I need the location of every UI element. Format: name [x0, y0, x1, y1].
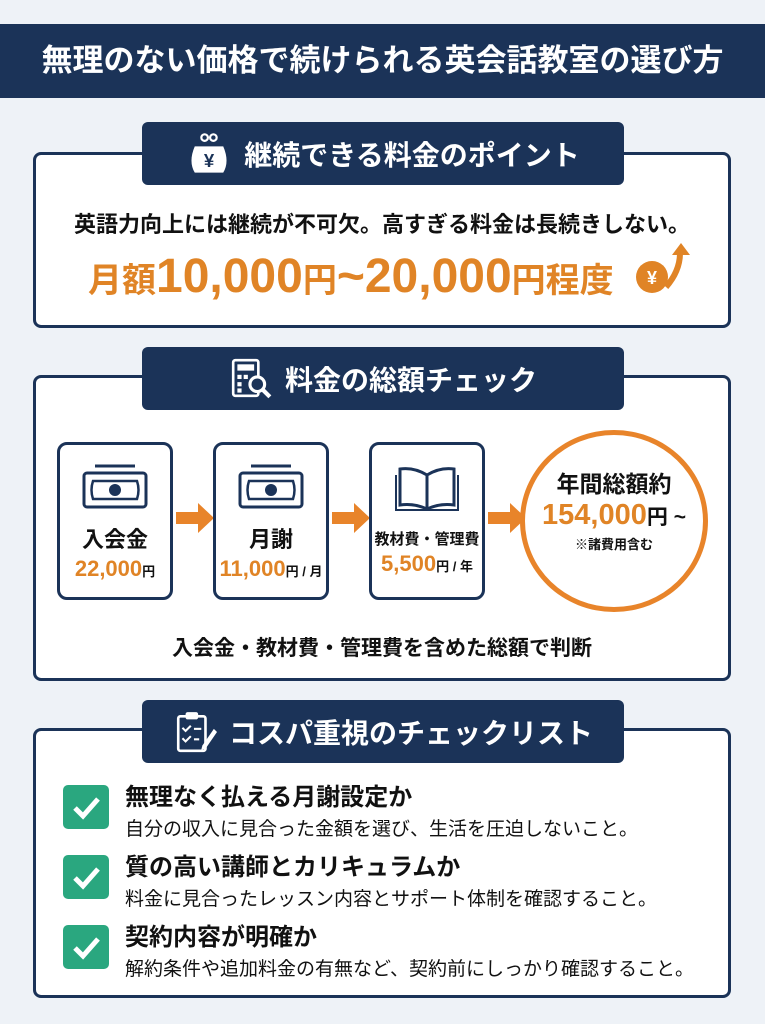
card: entry fee: [57, 442, 173, 600]
text: footer note: 入会金・教材費・管理費を含めた総額で判断: [172, 637, 592, 660]
item 3: 解約条件や追加料金の有無など、契約前にしっかり確認すること。: [125, 959, 694, 980]
heading tab: 料金の総額チェック: [142, 347, 624, 410]
arrow: [332, 503, 369, 533]
circle: annual total: 年間総額約: [556, 471, 672, 497]
arrow: [176, 503, 213, 533]
card: materials fee: [369, 442, 485, 600]
item 1: 自分の収入に見合った金額を選び、生活を圧迫しないこと。: [125, 819, 638, 840]
text: price range: 月額10,000円~20,000円程度: [88, 250, 614, 303]
item 1: 無理なく払える月謝設定か: [125, 784, 412, 811]
item 2: 質の高い講師とカリキュラムか: [125, 854, 460, 881]
heading tab: 料金の総額チェック: 料金の総額チェック: [285, 364, 537, 396]
card: monthly fee: 11,000円 / 月: [220, 556, 322, 581]
title: [0, 24, 765, 98]
heading tab: コスパ重視のチェックリスト: [142, 700, 624, 763]
icon: purse: ¥: [204, 150, 215, 171]
card: entry fee: 22,000円: [75, 556, 155, 581]
circle: annual total: 154,000円 ~: [542, 499, 686, 531]
panel: total cost check: [33, 375, 731, 681]
icon: check: [63, 785, 109, 829]
card: monthly fee: [213, 442, 329, 600]
icon: check: [63, 855, 109, 899]
card: materials fee: 教材費・管理費: [374, 531, 480, 548]
item 3: [63, 924, 694, 980]
text: description: 英語力向上には継続が不可欠。高すぎる料金は長続きしない。: [74, 212, 690, 237]
icon: clipboard: [176, 712, 217, 752]
item 3: 契約内容が明確か: [125, 924, 317, 951]
circle: annual total: [520, 430, 708, 612]
card: entry fee: 入会金: [82, 527, 148, 552]
heading tab: コスパ重視のチェックリスト: コスパ重視のチェックリスト: [229, 718, 593, 748]
icon: yen coin with arrow: [636, 243, 690, 293]
icon: yen coin with arrow: ¥: [647, 268, 657, 288]
panel: checklist: [33, 728, 731, 998]
icon: purse: [192, 133, 226, 173]
item 1: [63, 784, 638, 840]
card: monthly fee: 月謝: [249, 527, 293, 552]
circle: annual total: ※諸費用含む: [575, 537, 653, 552]
title: 無理のない価格で続けられる英会話教室の選び方: [42, 43, 724, 78]
panel: continuing fee points: [33, 152, 731, 328]
icon: check: [63, 925, 109, 969]
item 2: 料金に見合ったレッスン内容とサポート体制を確認すること。: [125, 889, 657, 910]
arrow: [488, 503, 520, 533]
heading tab: 継続できる料金のポイント: 継続できる料金のポイント: [244, 140, 580, 170]
heading tab: 継続できる料金のポイント: [142, 122, 624, 185]
icon: calculator with magnifier: [232, 358, 272, 398]
card: materials fee: 5,500円 / 年: [381, 551, 473, 576]
item 2: [63, 854, 657, 910]
